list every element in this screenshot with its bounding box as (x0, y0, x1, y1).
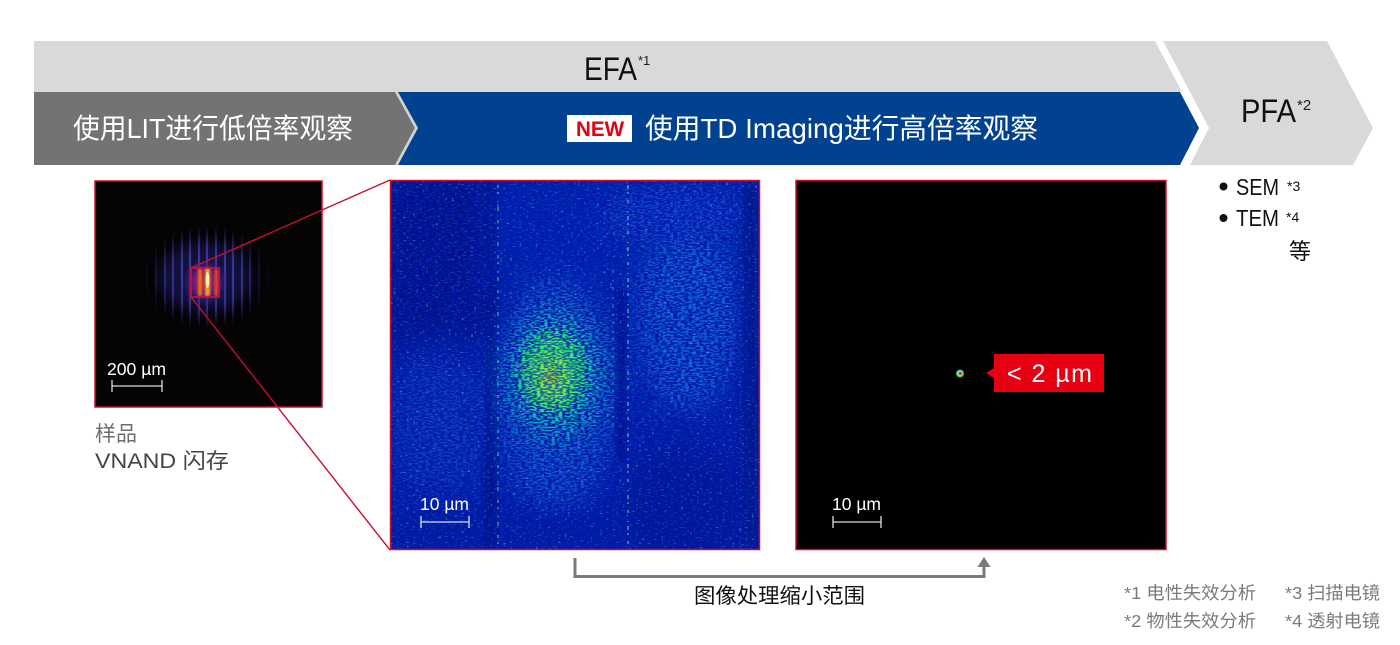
PFA methods list: 等 (1289, 239, 1311, 264)
hot spot (956, 370, 964, 378)
PFA methods list: SEM (1236, 174, 1279, 200)
noise speckle (391, 181, 759, 549)
arrow: PFA (1163, 41, 1373, 165)
panel: processed image (796, 180, 1166, 550)
sample caption: VNAND 闪存 (95, 450, 229, 473)
label: EFA: EFA (584, 51, 638, 87)
scale bar: 200 µm: 200 µm (107, 359, 166, 379)
arrow: TD Imaging high magnification (398, 92, 1199, 165)
panel: TD Imaging raw image (390, 180, 760, 550)
heat pattern: vertical stripes (147, 222, 268, 330)
PFA methods list: TEM (1236, 205, 1279, 231)
badge: NEW: NEW (576, 118, 624, 141)
footnotes (1124, 583, 1380, 631)
sample caption: 样品 (95, 423, 137, 446)
label: TD Imaging observation: 使用TD Imaging进行高倍率观察 (645, 113, 1038, 144)
callout: < 2 µm (986, 354, 1104, 392)
footnotes: *2 物性失效分析 (1124, 611, 1256, 631)
sample caption (95, 423, 229, 473)
connector lines: zoom from LIT to TD image (191, 180, 390, 550)
footnotes: *1 电性失效分析 (1124, 583, 1256, 603)
scale bar: 10 µm (832, 494, 881, 528)
hot spot lift over noise (525, 336, 581, 408)
vertical bright traces (484, 185, 741, 548)
scale bar: 10 µm (420, 494, 469, 528)
footnotes: *4 透射电镜 (1285, 611, 1380, 631)
label: EFA: *1 (638, 53, 650, 68)
label: LIT observation: 使用LIT进行低倍率观察 (73, 113, 353, 144)
heat map: low-frequency intensity (391, 181, 759, 549)
footnotes: *3 扫描电镜 (1285, 583, 1380, 603)
scale bar: 10 µm: 10 µm (832, 494, 881, 514)
callout: < 2 µm: < 2 µm (1007, 360, 1092, 388)
zoom region box (191, 268, 219, 297)
label: narrowing by image processing: 图像处理缩小范围 (694, 585, 865, 608)
scale bar: 200 µm (107, 359, 166, 392)
PFA methods list (1220, 174, 1311, 264)
bracket arrow: image processing (575, 557, 990, 608)
panel: LIT image (95, 181, 322, 407)
arrow band: EFA (34, 41, 1182, 92)
label: PFA: *2 (1297, 97, 1311, 114)
PFA methods list: *3 (1287, 178, 1300, 194)
label: PFA: PFA (1241, 93, 1297, 129)
PFA methods list: *4 (1286, 209, 1299, 225)
badge: NEW (567, 115, 632, 142)
arrow: LIT low magnification (34, 92, 418, 165)
scale bar: 10 µm: 10 µm (420, 494, 469, 514)
